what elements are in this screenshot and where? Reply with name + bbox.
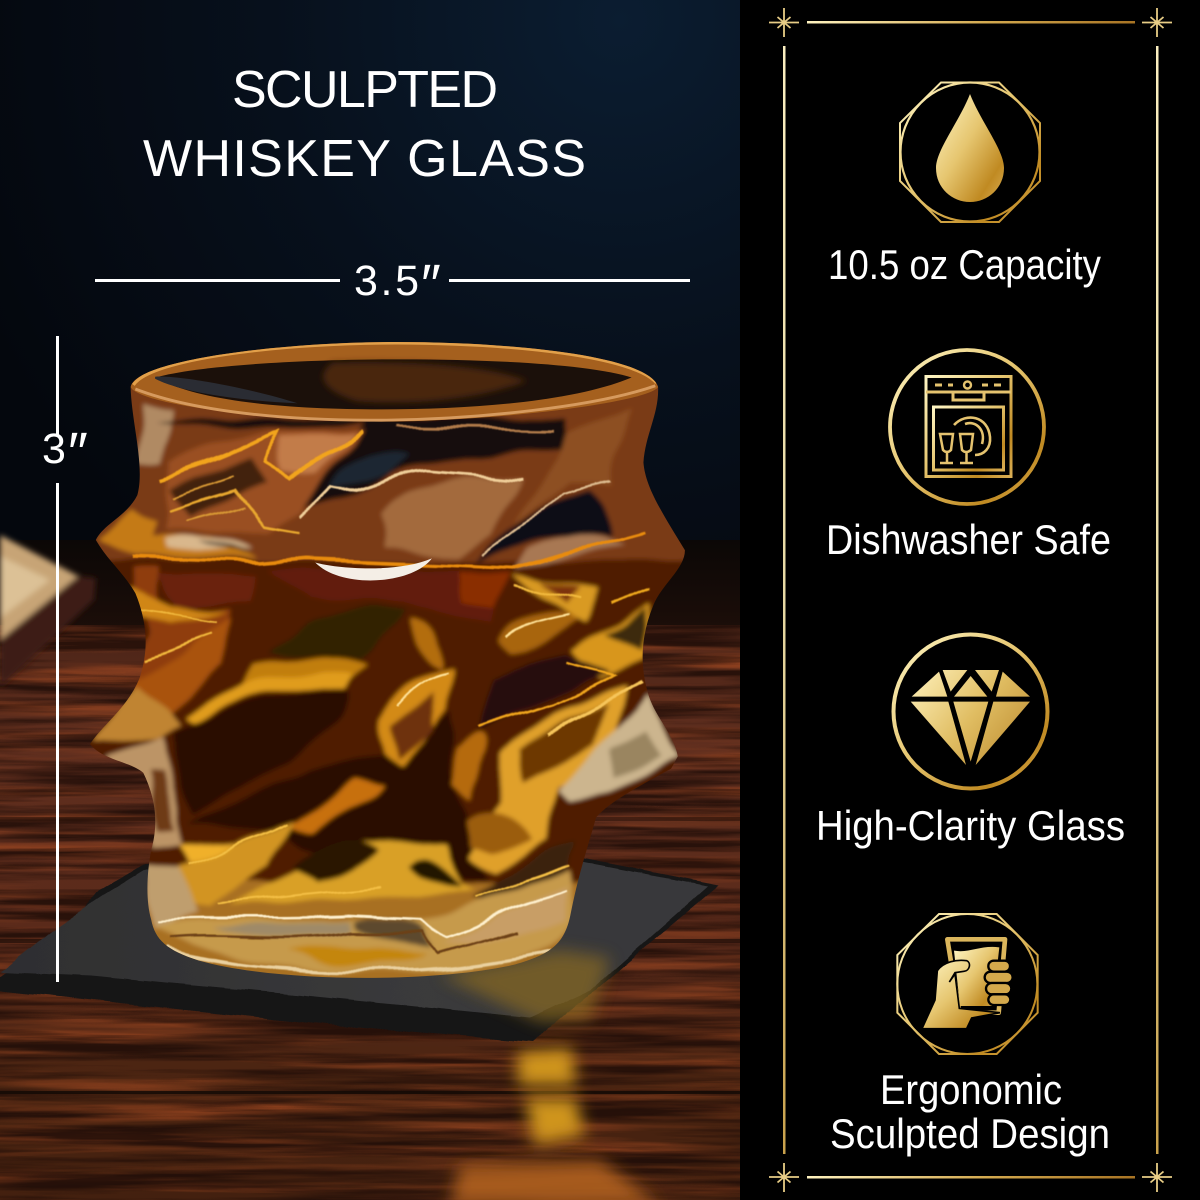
panel: features sidebar: [740, 0, 1200, 1200]
title: [143, 61, 586, 188]
glass facets layer: [90, 342, 685, 978]
upper zone: [139, 401, 175, 462]
photo background: dark wall and wooden table: [0, 0, 740, 1200]
white highlight on the liquid: [315, 558, 432, 580]
feature: high-clarity glass: High-Clarity Glass: [816, 802, 1125, 849]
feature: ergonomic sculpted design: [830, 914, 1110, 1157]
icon: diamond: [894, 634, 1048, 788]
width dimension: 3.5 inches: [95, 252, 690, 315]
feature: ergonomic sculpted design: Ergonomic: [880, 1066, 1062, 1113]
width dimension: 3.5 inches: ″: [421, 252, 441, 315]
table reflection of whiskey: [450, 1048, 660, 1200]
feature: capacity: [828, 82, 1101, 288]
icon: dishwasher: [890, 350, 1044, 504]
slate coaster: [0, 858, 719, 1042]
crisp glass highlights: [131, 428, 653, 971]
rim and interior: [131, 342, 658, 422]
book on the table: [0, 535, 96, 688]
glass base fills: [145, 862, 199, 928]
height dimension: 3 inches: 3: [42, 425, 66, 473]
feature: ergonomic sculpted design: Sculpted Design: [830, 1110, 1110, 1157]
title: WHISKEY GLASS: [143, 130, 586, 188]
height dimension: 3 inches: [42, 336, 88, 982]
icon: hand holding glass: [897, 914, 1038, 1054]
feature: dishwasher safe: [826, 350, 1111, 563]
whiskey glass illustration: [90, 342, 685, 978]
width dimension: 3.5 inches: 3.5: [354, 257, 419, 305]
title: SCULPTED: [232, 61, 498, 119]
height dimension: 3 inches: ″: [68, 420, 88, 483]
feature: high-clarity glass: [816, 634, 1125, 849]
feature: capacity: 10.5 oz Capacity: [828, 241, 1101, 288]
gold frame: [769, 8, 1172, 1192]
feature: dishwasher safe: Dishwasher Safe: [826, 516, 1111, 563]
liquid zone: [127, 569, 230, 699]
icon: droplet: [900, 82, 1040, 222]
